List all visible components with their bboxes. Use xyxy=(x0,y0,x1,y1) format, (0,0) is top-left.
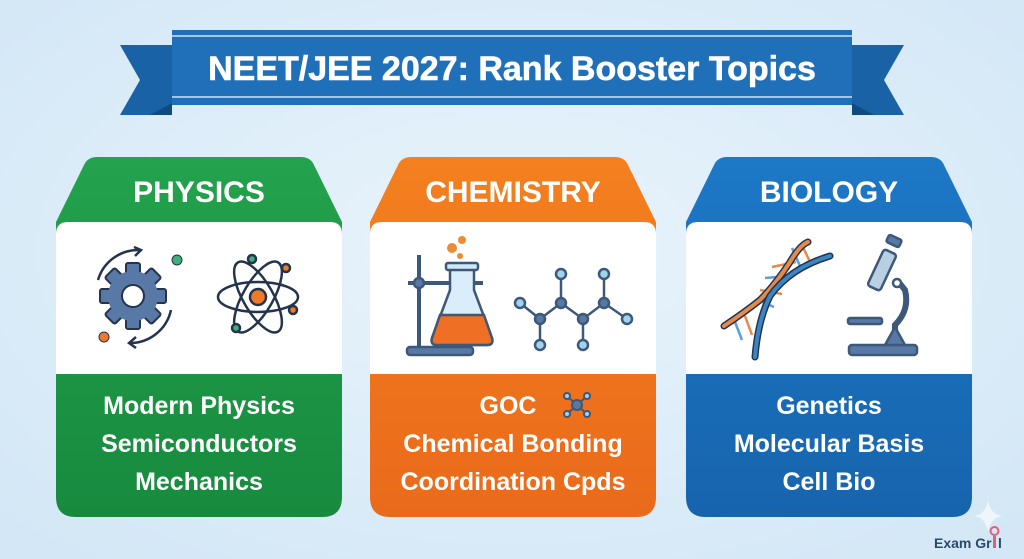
text: biology topics: Genetics xyxy=(776,392,882,420)
heading: physics: PHYSICS xyxy=(133,176,265,209)
text: chemistry topics: Chemical Bonding xyxy=(403,430,623,458)
logo: Exam Gril: Exam Gr xyxy=(934,535,992,551)
text: physics topics xyxy=(101,392,297,496)
heading: biology: BIOLOGY xyxy=(760,176,898,209)
text: chemistry topics xyxy=(401,392,625,496)
logo: Exam Gril xyxy=(934,500,1002,551)
panel: chemistry xyxy=(370,157,656,517)
text: biology topics xyxy=(734,392,924,496)
icon: small molecule xyxy=(564,393,590,417)
icon: gear xyxy=(98,247,182,348)
text: chemistry topics: Coordination Cpds xyxy=(401,468,625,496)
icon: molecule xyxy=(515,269,632,350)
text: biology topics: Molecular Basis xyxy=(734,430,924,458)
panel: physics xyxy=(56,157,342,517)
heading: chemistry: CHEMISTRY xyxy=(425,176,601,209)
text: chemistry topics: GOC xyxy=(480,392,536,420)
text: physics topics: Semiconductors xyxy=(101,430,297,458)
icon: atom xyxy=(218,255,298,339)
title banner xyxy=(120,30,904,115)
logo: Exam Gril: l xyxy=(998,535,1002,551)
text: physics topics: Mechanics xyxy=(135,468,263,496)
text: biology topics: Cell Bio xyxy=(782,468,876,496)
text: physics topics: Modern Physics xyxy=(103,392,295,420)
title text: NEET/JEE 2027: Rank Booster Topics xyxy=(208,50,816,88)
icon: DNA xyxy=(724,242,830,357)
icon: flask on stand xyxy=(407,236,492,355)
panel: biology xyxy=(686,157,972,517)
icon: microscope xyxy=(848,234,917,355)
